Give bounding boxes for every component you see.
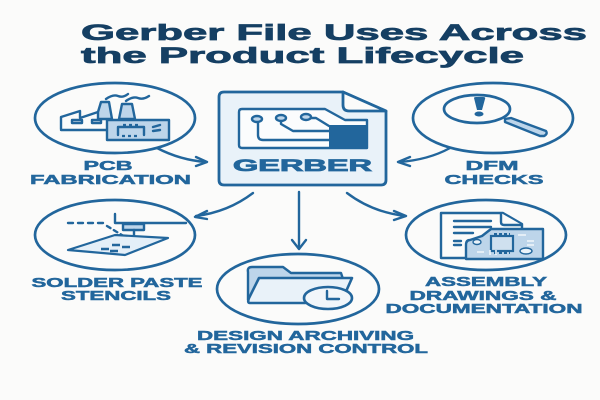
label: ASSEMBLY — [425, 274, 548, 289]
label: DFM — [466, 158, 518, 173]
icon: document and PCB — [441, 213, 543, 259]
label: GERBER: GERBER — [233, 156, 372, 175]
label: CHECKS — [444, 172, 544, 187]
arrow: fabrication to Gerber — [157, 148, 207, 166]
title — [81, 20, 587, 68]
arrow: DFM to Gerber — [398, 148, 450, 166]
panel: design archiving — [184, 254, 428, 356]
label — [30, 158, 191, 187]
arrow: Gerber to assembly — [347, 193, 406, 220]
panel: PCB fabrication — [30, 83, 195, 187]
icon: document — [219, 92, 386, 185]
icon: stencil printer — [68, 214, 186, 255]
label: DESIGN ARCHIVING — [197, 328, 414, 343]
panel: assembly drawings — [386, 200, 582, 316]
label — [184, 328, 428, 356]
panel: central Gerber file — [219, 92, 386, 185]
arrow: Gerber to solder paste stencils — [195, 193, 253, 219]
label: DOCUMENTATION — [386, 301, 582, 316]
panel: solder paste stencils — [32, 200, 203, 303]
label — [444, 158, 544, 187]
arrow: Gerber to archiving — [292, 192, 306, 249]
label: & REVISION CONTROL — [184, 341, 428, 356]
icon: folded corner — [343, 92, 386, 111]
label: DRAWINGS & — [410, 288, 556, 303]
label — [386, 274, 582, 316]
label: PCB — [84, 158, 132, 173]
icon: folder with clock — [248, 267, 352, 309]
panel: DFM checks — [413, 83, 573, 187]
label: STENCILS — [61, 288, 172, 303]
title: the Product Lifecycle — [81, 43, 524, 68]
title: Gerber File Uses Across — [81, 20, 587, 45]
label: SOLDER PASTE — [32, 275, 203, 290]
icon: magnifier with exclamation — [444, 95, 547, 136]
label: FABRICATION — [30, 172, 191, 187]
icon: factory — [61, 94, 169, 140]
icon: circuit board — [239, 109, 367, 148]
label — [32, 275, 203, 303]
